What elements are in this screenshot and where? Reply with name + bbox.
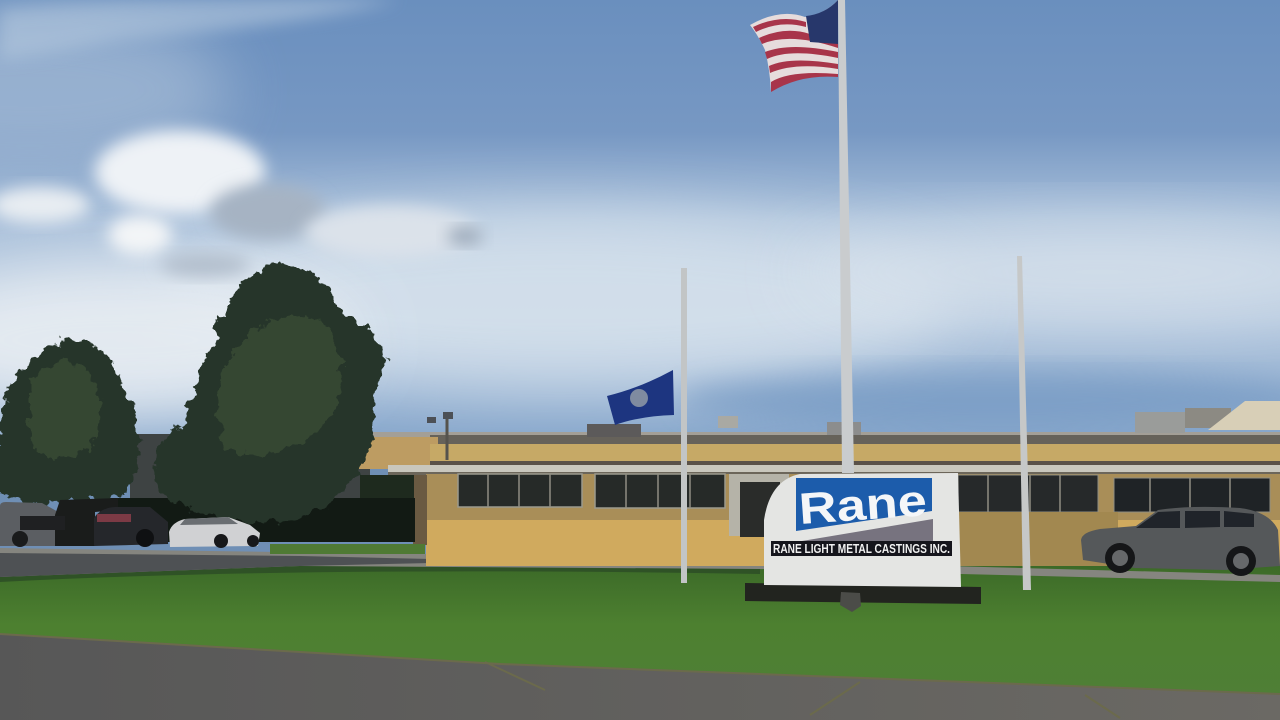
driveway (0, 548, 1280, 582)
window mullions (488, 474, 690, 508)
logo: grey wedge (802, 519, 933, 541)
foreground asphalt road (0, 634, 1280, 720)
US flag (750, 0, 838, 92)
rooftop units (587, 424, 641, 437)
state flag blue (607, 370, 674, 425)
ground: grass lawn (0, 566, 1280, 696)
truck (0, 502, 65, 546)
flagpole centre tall (838, 0, 854, 473)
logo: blue banner (796, 478, 932, 531)
lawn strip behind road (270, 544, 425, 554)
sign: Rane Light Metal Castings Inc. (764, 473, 961, 587)
canopy (388, 465, 1280, 473)
light pole (446, 415, 448, 460)
parked cars group (0, 498, 260, 548)
company name strip: RANE LIGHT METAL CASTINGS INC. (773, 541, 950, 556)
sign base (745, 583, 981, 604)
back building left (130, 434, 370, 534)
left window band (458, 474, 582, 507)
clouds (0, 0, 483, 277)
right windows (958, 475, 1098, 512)
building (358, 401, 1280, 566)
ground spotlight (840, 592, 861, 612)
sign panel (764, 473, 961, 587)
flagpole right (1017, 256, 1031, 590)
roof (358, 432, 1280, 438)
tree: left (0, 340, 139, 502)
tree: right large (154, 262, 386, 522)
middle window band (595, 474, 725, 508)
white car (169, 517, 260, 547)
sky background (0, 0, 1280, 440)
entrance (729, 474, 789, 536)
road edge line and cracks (0, 634, 1280, 718)
SUV right (1081, 507, 1280, 576)
logo: white wordmark: Rane (797, 476, 928, 534)
dark hedge under trees (100, 498, 415, 542)
brick wall (426, 474, 1280, 566)
flagpole left (681, 268, 687, 583)
SUV dark (94, 507, 168, 546)
